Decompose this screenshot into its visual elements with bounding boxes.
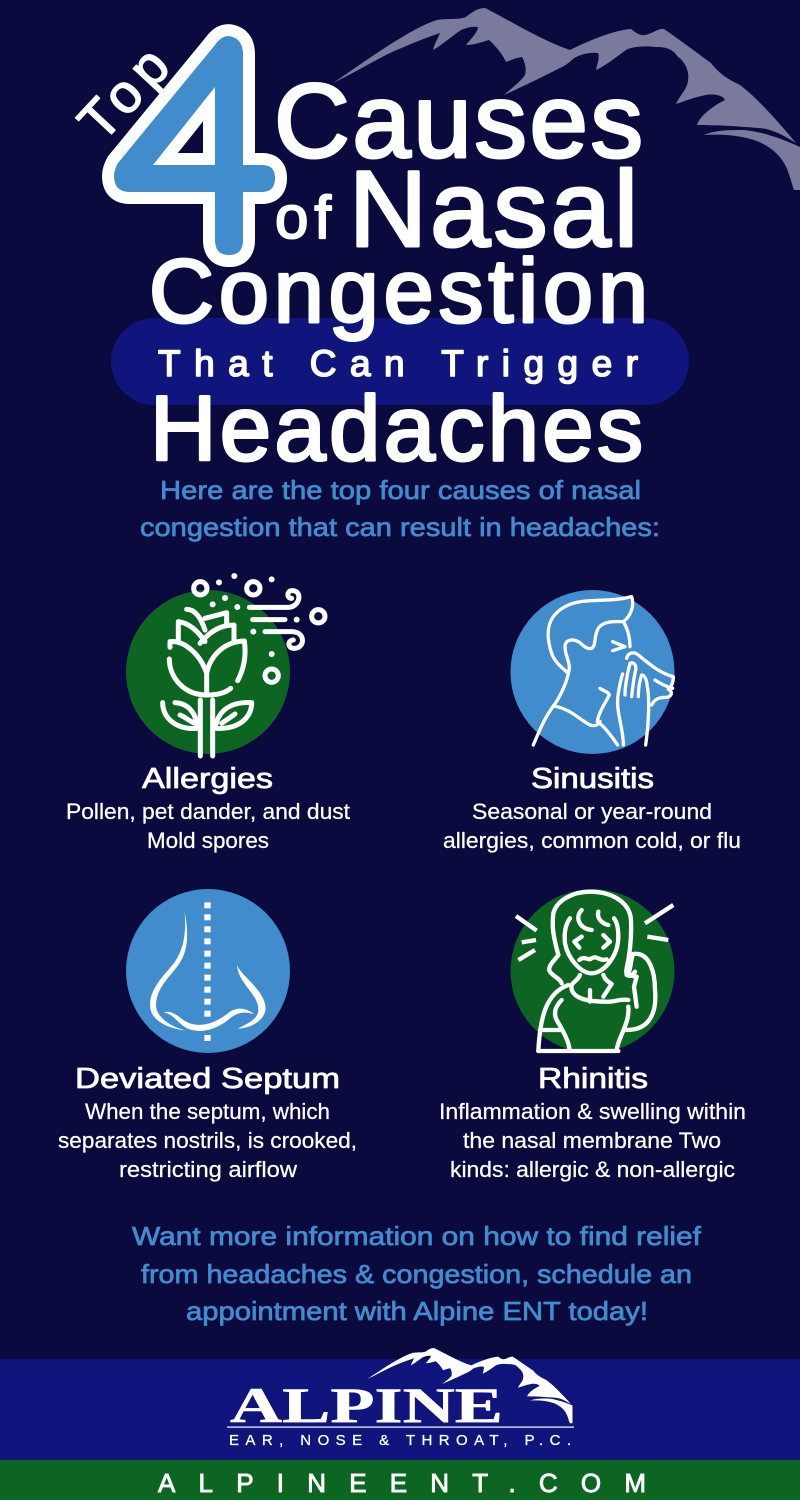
icon: person blowing nose	[533, 597, 673, 745]
text: rhinitis: the nasal membrane Two	[463, 1128, 721, 1153]
pill banner	[111, 318, 689, 405]
icon: nose with septum line	[150, 902, 266, 1041]
heading: Allergies: Allergies	[142, 763, 273, 795]
word: Headaches: Headaches	[150, 378, 643, 480]
text: sinusitis: Seasonal or year-round	[472, 799, 712, 824]
text: rhinitis	[439, 1099, 746, 1182]
panel: deviated septum	[58, 889, 357, 1182]
panel: allergies	[66, 573, 350, 853]
text: allergies: Pollen, pet dander, and dust	[66, 799, 350, 824]
icon circle: sinusitis	[510, 590, 674, 754]
text: deviated septum	[58, 1099, 357, 1182]
word: Top: Top	[67, 30, 187, 152]
word: Congestion: Congestion	[149, 242, 648, 342]
logo tagline: EAR, NOSE & THROAT, P.C.	[229, 1432, 571, 1449]
band: website background	[0, 1460, 800, 1500]
mountain backdrop	[333, 8, 800, 190]
call to action: from headaches & congestion, schedule an	[141, 1259, 692, 1289]
text: deviated septum: When the septum, which	[85, 1099, 330, 1124]
call to action: appointment with Alpine ENT today!	[186, 1296, 648, 1326]
band: logo background	[0, 1359, 800, 1460]
word: of: of	[275, 184, 331, 251]
icon circle: allergies	[126, 590, 290, 754]
text: deviated septum: separates nostrils, is crooked,	[58, 1128, 357, 1153]
word: Nasal: Nasal	[349, 148, 638, 269]
big number 4	[114, 36, 275, 255]
panel: sinusitis	[443, 590, 741, 853]
call to action	[132, 1221, 702, 1326]
text: rhinitis: Inflammation & swelling within	[439, 1099, 746, 1124]
intro text: congestion that can result in headaches:	[140, 512, 660, 542]
text: allergies	[66, 799, 350, 853]
text: sinusitis: allergies, common cold, or flu	[443, 828, 741, 853]
call to action: Want more information on how to find relief	[132, 1221, 702, 1251]
text: deviated septum: restricting airflow	[119, 1157, 297, 1182]
intro text	[140, 475, 660, 542]
heading: Sinusitis: Sinusitis	[531, 763, 654, 795]
website address: ALPINEENT.COM	[158, 1468, 646, 1498]
logo: Alpine ENT	[227, 1348, 574, 1449]
icon: flower with pollen	[163, 573, 325, 756]
icon circle: rhinitis	[510, 889, 674, 1053]
heading: Deviated Septum: Deviated Septum	[75, 1063, 340, 1095]
title block	[67, 30, 689, 480]
text: sinusitis	[443, 799, 741, 853]
icon circle: deviated septum	[126, 889, 290, 1053]
line: That Can Trigger: That Can Trigger	[158, 343, 638, 384]
icon: woman with headache	[516, 892, 673, 1051]
word: Causes: Causes	[274, 63, 643, 180]
logo wordmark: ALPINE	[230, 1377, 503, 1433]
text: rhinitis: kinds: allergic & non-allergic	[450, 1157, 735, 1182]
text: allergies: Mold spores	[147, 828, 269, 853]
logo mountain	[367, 1348, 572, 1423]
panel: rhinitis	[439, 889, 746, 1182]
heading: Rhinitis: Rhinitis	[538, 1063, 648, 1095]
intro text: Here are the top four causes of nasal	[160, 475, 641, 505]
